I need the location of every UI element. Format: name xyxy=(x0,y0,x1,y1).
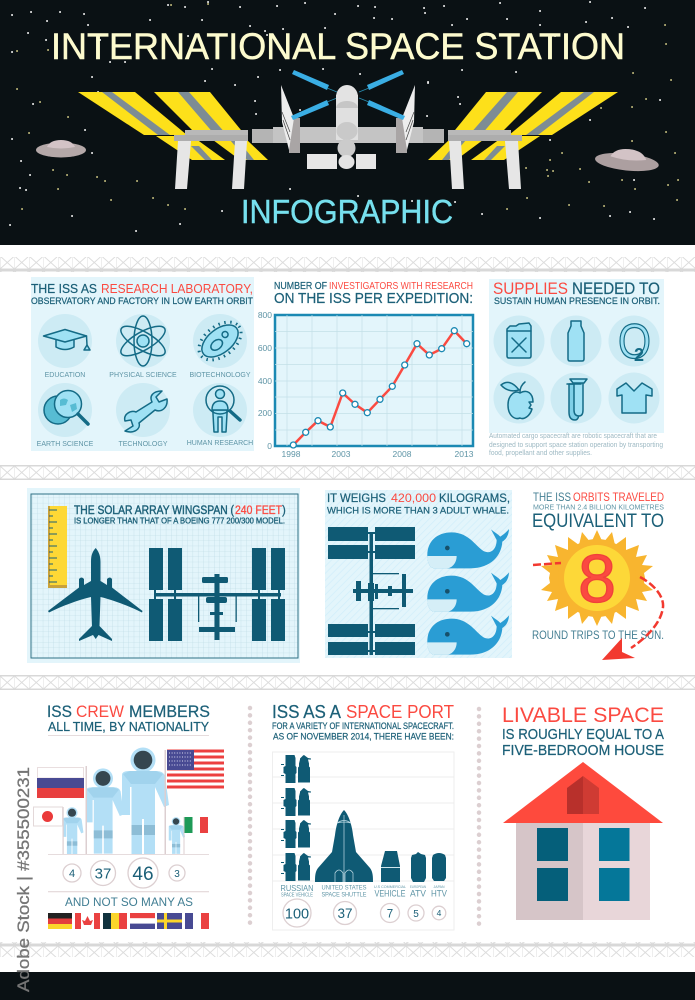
whales xyxy=(427,529,509,655)
wingspan heading xyxy=(74,505,286,526)
craft labels: HTV xyxy=(431,888,448,900)
crew heading: ISS xyxy=(47,703,72,721)
chart heading xyxy=(274,280,473,307)
flying saucer right xyxy=(594,146,660,174)
crew counts: 4 xyxy=(69,868,75,880)
craft labels: U.S COMMERCIAL xyxy=(374,885,406,889)
stock watermark: Adobe Stock | #355500231 xyxy=(15,767,33,992)
weight heading: IT WEIGHS xyxy=(327,492,386,505)
panel: orbits equivalent xyxy=(532,490,664,660)
label: PHYSICAL SCIENCE xyxy=(109,372,177,379)
icon: biotechnology xyxy=(192,314,248,368)
header background xyxy=(0,0,695,245)
russian space vehicles xyxy=(281,755,311,881)
space station silhouette xyxy=(149,548,285,641)
research heading: RESEARCH LABORATORY, xyxy=(101,281,253,296)
icon: t-shirt xyxy=(608,372,660,424)
caption: designed to support space station operation by transporting xyxy=(489,440,663,449)
starfield xyxy=(10,2,678,231)
chart heading: ON THE ISS PER EXPEDITION: xyxy=(274,290,473,307)
weight heading xyxy=(327,492,510,516)
icon: water bottle xyxy=(550,316,602,366)
illustration: space station xyxy=(78,70,618,189)
x axis labels xyxy=(282,449,474,459)
icon: test tubes xyxy=(550,372,602,424)
supplies heading: SUPPLIES xyxy=(493,279,568,298)
panel: research laboratory xyxy=(31,277,254,451)
crew heading xyxy=(47,703,210,734)
livable heading: LIVABLE SPACE xyxy=(502,704,664,727)
icon: sun with number 8 xyxy=(541,530,653,626)
icon: fuel canister xyxy=(494,316,544,366)
craft labels: UNITED STATES xyxy=(322,884,367,892)
caption: Automated cargo spacecraft are robotic spacecraft that are xyxy=(489,431,657,440)
label: EARTH SCIENCE xyxy=(37,441,94,448)
space port heading: ISS AS A xyxy=(272,702,341,722)
line chart frame xyxy=(275,315,473,446)
panel: solar array wingspan xyxy=(27,488,300,663)
icon: technology wrench xyxy=(116,383,170,437)
craft labels: SPACE VEHICLE xyxy=(281,892,313,898)
icon: physical science xyxy=(116,314,170,368)
flags row xyxy=(48,913,209,929)
flag: Japan xyxy=(34,807,64,854)
flying saucer left xyxy=(36,140,86,158)
weight heading: 420,000 xyxy=(391,492,437,505)
craft labels: SPACE SHUTTLE xyxy=(322,892,367,898)
subtitle: INFOGRAPHIC xyxy=(241,193,453,230)
commercial vehicle xyxy=(381,851,400,882)
icon: sun with number 8: 8 xyxy=(578,541,616,617)
research heading xyxy=(31,281,253,307)
x axis labels: 2008 xyxy=(393,449,412,459)
livable heading: FIVE-BEDROOM HOUSE xyxy=(502,742,664,759)
panel: supplies xyxy=(489,279,664,457)
orbit heading xyxy=(532,490,664,532)
crew counts: 46 xyxy=(132,864,154,885)
y axis labels: 800 xyxy=(258,310,272,320)
wingspan heading: ) xyxy=(282,505,286,517)
line series xyxy=(290,328,470,448)
x axis labels: 2003 xyxy=(332,449,351,459)
flag: USA xyxy=(164,750,224,854)
HTV xyxy=(432,853,446,881)
craft labels: ATV xyxy=(410,888,427,900)
panel: space port xyxy=(272,702,454,930)
orbit heading: ORBITS TRAVELED xyxy=(573,490,664,504)
space station side view xyxy=(328,527,415,655)
craft labels: VEHICLE xyxy=(374,888,406,898)
caption: ROUND TRIPS TO THE SUN. xyxy=(532,630,664,642)
livable heading xyxy=(502,704,664,759)
craft labels: RUSSIAN xyxy=(280,883,314,893)
weight heading: WHICH IS MORE THAN 3 ADULT WHALE. xyxy=(327,506,509,516)
y axis labels: 600 xyxy=(258,343,272,353)
crew counts xyxy=(63,858,185,888)
craft labels xyxy=(280,883,448,900)
flag: Italy xyxy=(184,817,208,854)
orbit heading: EQUIVALENT TO xyxy=(532,511,664,532)
orbit heading: THE ISS xyxy=(533,490,571,504)
craft counts: 7 xyxy=(387,908,393,920)
craft counts: 5 xyxy=(413,909,419,920)
crew counts: 3 xyxy=(174,869,180,880)
title: INTERNATIONAL SPACE STATION xyxy=(51,26,625,67)
flag: Russia xyxy=(37,766,87,854)
label: EDUCATION xyxy=(45,372,85,379)
caption: food, propellant and other supplies. xyxy=(489,448,592,457)
supplies heading: NEEDED TO xyxy=(572,279,660,298)
label: HUMAN RESEARCH xyxy=(187,440,253,447)
space port heading xyxy=(272,702,454,742)
icon: oxygen: O xyxy=(618,315,651,369)
panel: investigators chart xyxy=(258,280,474,459)
wingspan heading: 240 FEET xyxy=(235,505,282,517)
wingspan heading: THE SOLAR ARRAY WINGSPAN ( xyxy=(74,505,234,517)
chart heading: NUMBER OF xyxy=(274,280,327,292)
x axis labels: 2013 xyxy=(455,449,474,459)
icon: earth science xyxy=(38,383,92,437)
craft counts xyxy=(283,899,446,927)
craft counts: 4 xyxy=(437,908,442,918)
icon: human research xyxy=(193,383,247,437)
craft counts: 37 xyxy=(337,906,353,921)
y axis labels: 400 xyxy=(258,376,272,386)
y axis labels: 200 xyxy=(258,408,272,418)
y axis labels: 0 xyxy=(267,441,272,451)
panel: weight and whales xyxy=(325,490,512,658)
label: TECHNOLOGY xyxy=(118,441,168,448)
weight heading: KILOGRAMS, xyxy=(439,492,510,505)
space shuttle xyxy=(315,810,373,882)
crew heading: CREW xyxy=(76,703,124,721)
panel: crew members xyxy=(34,703,224,929)
ATV xyxy=(411,852,426,882)
research heading: OBSERVATORY AND FACTORY IN LOW EARTH ORBIT xyxy=(31,296,253,307)
icon: oxygen: 2 xyxy=(634,345,644,365)
chart heading: INVESTIGATORS WITH RESEARCH xyxy=(329,280,473,292)
crew heading: MEMBERS xyxy=(129,703,210,721)
footer bar xyxy=(0,972,695,1000)
livable heading: IS ROUGHLY EQUAL TO A xyxy=(502,726,664,743)
crew counts: 37 xyxy=(95,866,111,882)
space port heading: AS OF NOVEMBER 2014, THERE HAVE BEEN: xyxy=(273,732,454,742)
supplies heading xyxy=(493,279,660,306)
airplane silhouette xyxy=(48,548,142,641)
research heading: THE ISS AS xyxy=(31,281,97,296)
craft labels: JAPAN xyxy=(434,885,445,889)
y axis labels xyxy=(258,310,272,451)
crew caption: AND NOT SO MANY AS xyxy=(65,895,193,909)
label: BIOTECHNOLOGY xyxy=(189,372,251,379)
space port heading: SPACE PORT xyxy=(346,702,454,722)
caption xyxy=(489,431,663,457)
orbit heading: MORE THAN 2.4 BILLION KILOMETRES xyxy=(533,502,664,512)
house illustration xyxy=(503,762,663,920)
craft counts: 100 xyxy=(285,906,309,922)
crew heading: ALL TIME, BY NATIONALITY xyxy=(48,720,210,734)
x axis labels: 1998 xyxy=(282,449,301,459)
panel: livable space xyxy=(502,704,664,920)
icon: ruler xyxy=(48,506,67,588)
icon: apple xyxy=(494,372,544,424)
icon: education xyxy=(38,314,92,368)
astronauts xyxy=(63,748,185,854)
arrow: orbit path xyxy=(533,563,663,660)
craft labels: EUROPEAN xyxy=(410,885,426,889)
space port heading: FOR A VARIETY OF INTERNATIONAL SPACECRAFT. xyxy=(272,721,454,732)
wingspan heading: IS LONGER THAN THAT OF A BOEING 777 200/300 MODEL. xyxy=(74,516,285,526)
supplies heading: SUSTAIN HUMAN PRESENCE IN ORBIT. xyxy=(494,296,660,306)
